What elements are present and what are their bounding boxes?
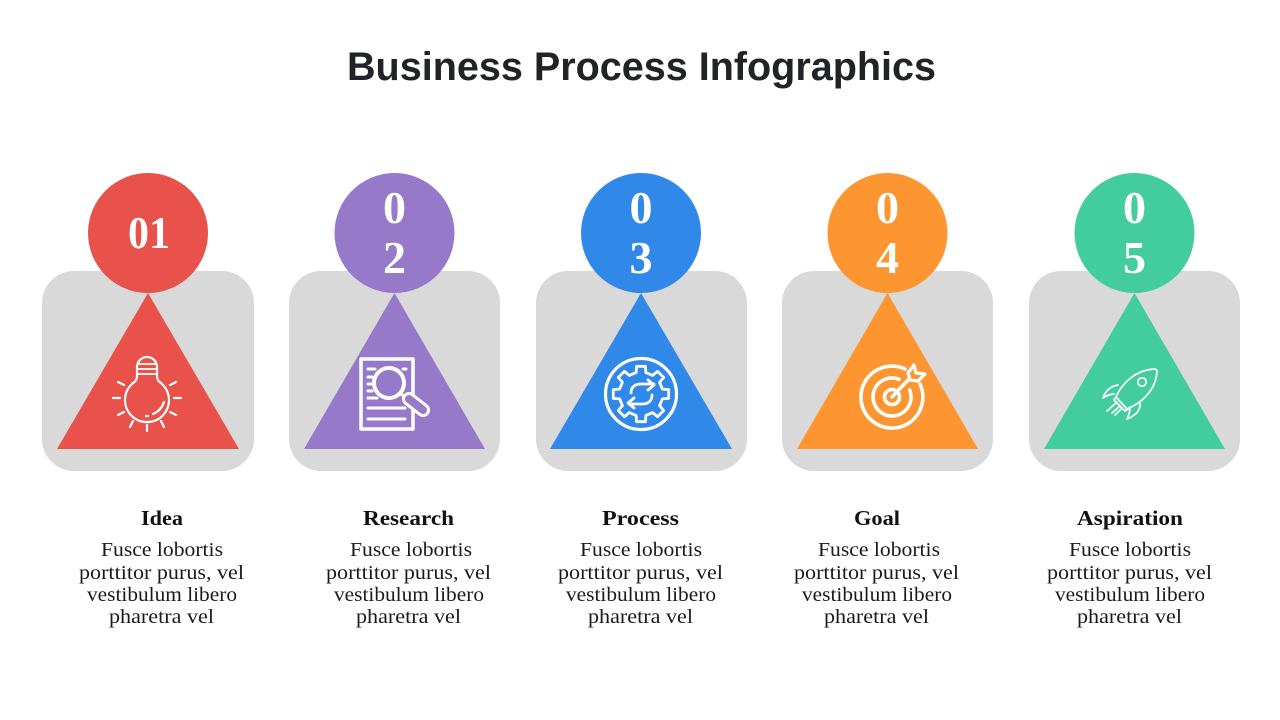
panel: 05 Aspiration	[1029, 173, 1240, 628]
panel: 04 Goal	[782, 173, 993, 628]
panel: 01 Idea	[42, 173, 254, 628]
description	[326, 539, 491, 628]
card background	[536, 271, 747, 471]
description: pharetra vel	[109, 606, 214, 628]
icon: rocket	[1103, 369, 1157, 419]
number circle	[581, 173, 701, 293]
description: vestibulum libero	[87, 584, 237, 606]
description: Fusce lobortis	[818, 539, 940, 561]
number: 5	[1123, 232, 1146, 283]
number: 3	[630, 232, 652, 283]
number circle	[828, 173, 948, 293]
card background	[1029, 271, 1240, 471]
number: 0	[630, 182, 652, 233]
triangle	[797, 293, 978, 449]
description: porttitor purus, vel	[326, 562, 491, 584]
number: 0	[876, 182, 899, 233]
description: porttitor purus, vel	[79, 562, 244, 584]
description	[79, 539, 244, 628]
panel: 02 Research	[289, 173, 500, 628]
heading: Idea	[141, 506, 184, 530]
heading: Aspiration	[1077, 506, 1183, 530]
description: Fusce lobortis	[101, 539, 223, 561]
description: porttitor purus, vel	[558, 562, 723, 584]
icon: target with arrow	[861, 365, 925, 428]
description: porttitor purus, vel	[794, 562, 959, 584]
number: 0	[1123, 182, 1146, 233]
triangle	[57, 293, 239, 449]
number: 2	[383, 232, 406, 283]
card background	[42, 271, 254, 471]
description: Fusce lobortis	[580, 539, 702, 561]
description	[558, 539, 723, 628]
description: porttitor purus, vel	[1047, 562, 1212, 584]
card background	[289, 271, 500, 471]
description: Fusce lobortis	[350, 539, 472, 561]
icon: gear with arrows	[606, 358, 676, 430]
number: 4	[876, 232, 899, 283]
heading: Goal	[854, 506, 900, 530]
description: vestibulum libero	[802, 584, 952, 606]
description: pharetra vel	[356, 606, 461, 628]
description: Fusce lobortis	[1069, 539, 1191, 561]
icon: light bulb	[113, 357, 181, 431]
description: vestibulum libero	[566, 584, 716, 606]
card background	[782, 271, 993, 471]
number circle	[334, 173, 454, 293]
description: vestibulum libero	[1055, 584, 1205, 606]
panel: 03 Process	[536, 173, 747, 628]
icon: document with magnifier	[361, 359, 423, 429]
heading: Process	[602, 506, 679, 530]
description: pharetra vel	[824, 606, 929, 628]
triangle	[304, 293, 485, 449]
number: 01	[128, 207, 170, 258]
description	[1047, 539, 1212, 628]
number: 0	[383, 182, 406, 233]
title: Business Process Infographics	[347, 45, 936, 89]
description: pharetra vel	[588, 606, 693, 628]
triangle	[1044, 293, 1225, 449]
description: vestibulum libero	[334, 584, 484, 606]
number circle	[88, 173, 208, 293]
triangle	[550, 293, 732, 449]
description: pharetra vel	[1077, 606, 1182, 628]
description	[794, 539, 959, 628]
number circle	[1074, 173, 1194, 293]
heading: Research	[363, 506, 454, 530]
